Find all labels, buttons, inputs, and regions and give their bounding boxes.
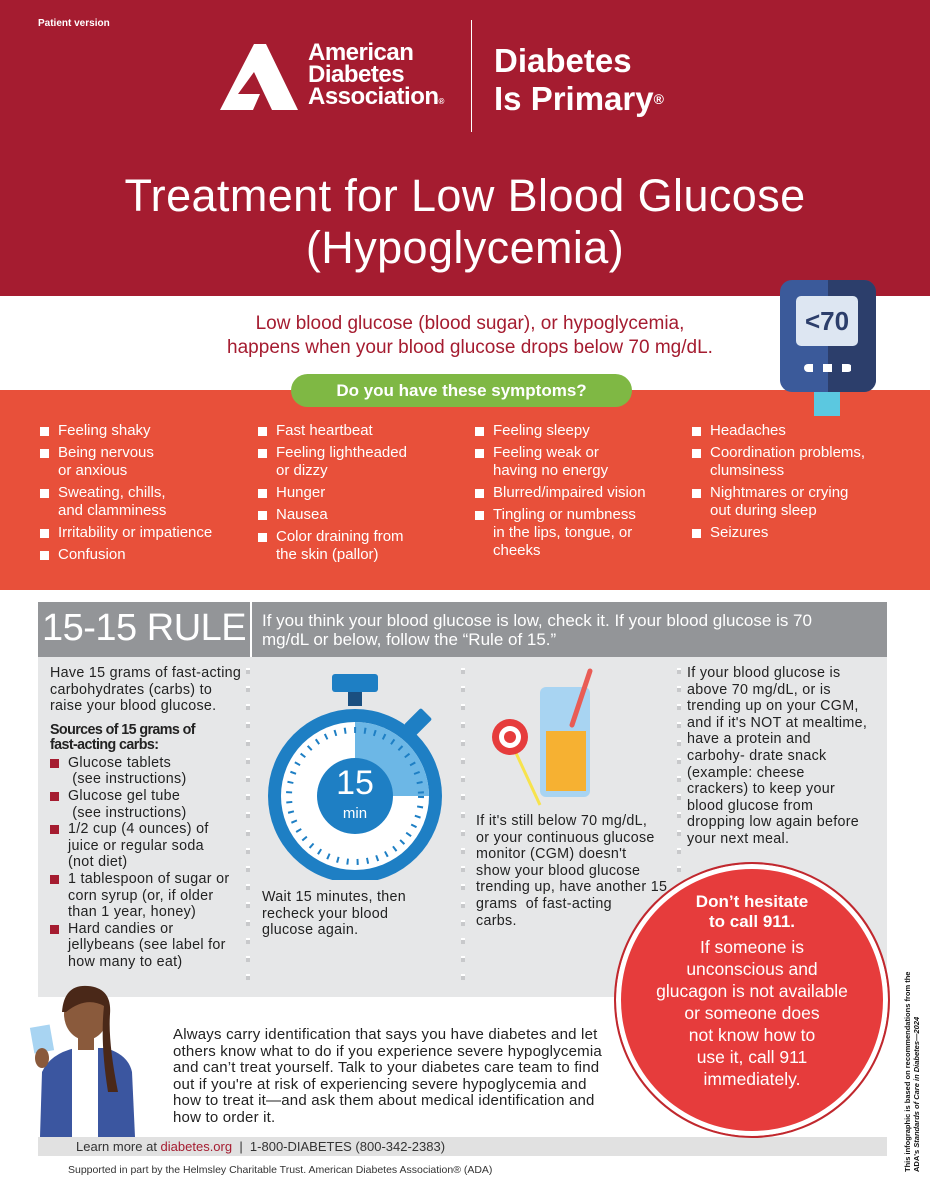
ID text: out if you're at risk of experiencing severe hypoglycemia and — [173, 1076, 587, 1093]
intro text: Low blood glucose (blood sugar), or hypoglycemia, — [256, 313, 684, 334]
symptoms col 1 — [40, 422, 212, 563]
symptoms col 1: Confusion — [58, 546, 126, 563]
step 2 text — [262, 889, 406, 938]
intro text: happens when your blood glucose drops below 70 mg/dL. — [227, 337, 713, 358]
symptoms col 2: or dizzy — [276, 462, 328, 479]
icon: glucose meter: <70 — [805, 306, 849, 336]
15-15 header — [38, 602, 887, 657]
step 3 text: or your continuous glucose — [476, 830, 655, 846]
15-15 header: mg/dL or below, follow the “Rule of 15.” — [262, 630, 556, 649]
symptoms col 2: Fast heartbeat — [276, 422, 373, 439]
symptoms col 4: out during sleep — [710, 502, 817, 519]
step 3 text: trending up, have another 15 — [476, 879, 667, 895]
step 4 text: crackers) to keep your — [687, 781, 835, 797]
symptoms col 3: Blurred/impaired vision — [493, 484, 646, 501]
icon: juice and lollipop — [492, 668, 592, 806]
step 1 text: 1 tablespoon of sugar or — [68, 871, 229, 887]
ID text: how to treat it—and ask them about medical identification and — [173, 1092, 595, 1109]
vertical note: This infographic is based on recommendations from the — [903, 972, 912, 1172]
step 4 text: carbohy- drate snack — [687, 748, 827, 764]
symptoms pill — [291, 374, 632, 407]
step 1 text: (not diet) — [68, 854, 127, 870]
symptoms col 4: Headaches — [710, 422, 786, 439]
ID text — [173, 1026, 602, 1126]
step 3 text — [476, 813, 667, 929]
symptoms band — [0, 390, 930, 590]
symptoms col 4: Coordination problems, — [710, 444, 865, 461]
symptoms col 3: Feeling sleepy — [493, 422, 590, 439]
step 4 text: have a protein and — [687, 731, 811, 747]
symptoms col 3: Feeling weak or — [493, 444, 599, 461]
callout: call 911: or someone does — [684, 1003, 820, 1023]
header band — [0, 0, 930, 296]
ID text: Always carry identification that says you have diabetes and let — [173, 1026, 598, 1043]
vertical note — [903, 972, 921, 1172]
callout: call 911: not know how to — [689, 1025, 815, 1045]
intro text — [227, 313, 713, 358]
symptoms col 4: Nightmares or crying — [710, 484, 848, 501]
symptoms col 3: having no energy — [493, 462, 608, 479]
logo: Association® — [308, 83, 444, 110]
step 1 text: carbohydrates (carbs) to — [50, 682, 212, 698]
footer bar: Learn more at diabetes.org | 1-800-DIABETES (800-342-2383) — [76, 1139, 445, 1154]
logo: American — [308, 39, 413, 66]
step 2 text: recheck your blood — [262, 906, 388, 922]
symptoms col 1: Feeling shaky — [58, 422, 151, 439]
step 1 text: Have 15 grams of fast-acting — [50, 665, 241, 681]
logo: Is Primary® — [494, 80, 664, 117]
symptoms col 2: Hunger — [276, 484, 325, 501]
symptoms col 2: Nausea — [276, 506, 328, 523]
callout: call 911: use it, call 911 — [697, 1047, 807, 1067]
step 1 text: raise your blood glucose. — [50, 698, 216, 714]
icon: stopwatch — [268, 674, 442, 880]
title: (Hypoglycemia) — [306, 222, 624, 273]
symptoms col 4 — [692, 422, 865, 541]
callout: call 911: glucagon is not available — [656, 981, 848, 1001]
icon: stopwatch: min — [343, 805, 367, 822]
step 1 text: how many to eat) — [68, 954, 182, 970]
logo: Diabetes — [308, 61, 404, 88]
step 1 text: jellybeans (see label for — [68, 937, 226, 953]
callout: call 911: Don’t hesitate — [696, 892, 808, 911]
step 1 text — [50, 665, 241, 970]
step 4 text: your next meal. — [687, 831, 789, 847]
icon: glucose meter — [780, 280, 876, 416]
step 3 text: carbs. — [476, 913, 517, 929]
symptoms col 1: Sweating, chills, — [58, 484, 166, 501]
logo: Diabetes — [494, 42, 632, 79]
step 1 text: corn syrup (or, if older — [68, 888, 213, 904]
rule panel — [38, 657, 887, 997]
step 1 text: than 1 year, honey) — [68, 904, 196, 920]
symptoms col 2: Color draining from — [276, 528, 404, 545]
ID text: others know what to do if you experience severe hypoglycemia — [173, 1043, 602, 1060]
15-15 header: If you think your blood glucose is low, check it. If your blood glucose is 70 — [262, 611, 812, 630]
symptoms col 1: Irritability or impatience — [58, 524, 212, 541]
ID text: and can’t treat yourself. Talk to your diabetes care team to find — [173, 1059, 599, 1076]
symptoms col 3: in the lips, tongue, or — [493, 524, 632, 541]
supported line: Supported in part by the Helmsley Charitable Trust. American Diabetes Association® (ADA) — [68, 1164, 492, 1176]
step 4 text: trending up on your CGM, — [687, 698, 859, 714]
step 4 text: (example: cheese — [687, 765, 805, 781]
15-15 header: 15-15 RULE — [42, 607, 246, 649]
symptoms col 2 — [258, 422, 407, 563]
symptoms col 3: cheeks — [493, 542, 541, 559]
step 1 text: (see instructions) — [72, 771, 187, 787]
footer bar — [38, 1137, 887, 1156]
symptoms col 1: and clamminess — [58, 502, 166, 519]
symptoms col 1: or anxious — [58, 462, 127, 479]
step 3 text: show your blood glucose — [476, 863, 640, 879]
step 1 text: Hard candies or — [68, 921, 173, 937]
callout: call 911: immediately. — [704, 1069, 800, 1089]
step 4 text: dropping low again before — [687, 814, 859, 830]
step 2 text: Wait 15 minutes, then — [262, 889, 406, 905]
patient version label: Patient version — [38, 18, 110, 29]
step 1 text: juice or regular soda — [68, 838, 204, 854]
ID text: how to order it. — [173, 1109, 275, 1126]
title — [124, 170, 806, 273]
step 4 text: and if it's NOT at mealtime, — [687, 715, 867, 731]
title: Treatment for Low Blood Glucose — [124, 170, 806, 221]
symptoms col 4: Seizures — [710, 524, 768, 541]
symptoms col 2: the skin (pallor) — [276, 546, 379, 563]
step 1 text: Glucose gel tube — [68, 788, 180, 804]
step 4 text: If your blood glucose is — [687, 665, 840, 681]
symptoms col 2: Feeling lightheaded — [276, 444, 407, 461]
step 4 text: blood glucose from — [687, 798, 813, 814]
callout: call 911 — [614, 862, 890, 1138]
callout: call 911: to call 911. — [709, 912, 795, 931]
symptoms col 3 — [475, 422, 646, 559]
step 2 text: glucose again. — [262, 922, 358, 938]
icon: stopwatch: 15 — [336, 764, 374, 802]
step 3 text: grams of fast-acting — [476, 896, 612, 912]
symptoms col 4: clumsiness — [710, 462, 784, 479]
symptoms col 1: Being nervous — [58, 444, 154, 461]
illustration: person with ID card — [30, 986, 135, 1137]
step 1 text: (see instructions) — [72, 805, 187, 821]
callout: call 911: If someone is — [700, 937, 804, 957]
symptoms col 3: Tingling or numbness — [493, 506, 636, 523]
vertical note: ADA's Standards of Care in Diabetes—2024 — [912, 1017, 921, 1172]
step 4 text — [687, 665, 867, 847]
step 3 text: If it's still below 70 mg/dL, — [476, 813, 647, 829]
symptoms pill: Do you have these symptoms? — [336, 381, 587, 400]
callout: call 911: unconscious and — [686, 959, 818, 979]
step 1 text: fast-acting carbs: — [50, 737, 158, 753]
step 1 text: Sources of 15 grams of — [50, 722, 195, 738]
step 4 text: above 70 mg/dL, or is — [687, 682, 831, 698]
logo — [220, 20, 664, 132]
step 3 text: monitor (CGM) doesn't — [476, 846, 626, 862]
step 1 text: 1/2 cup (4 ounces) of — [68, 821, 209, 837]
step 1 text: Glucose tablets — [68, 755, 171, 771]
